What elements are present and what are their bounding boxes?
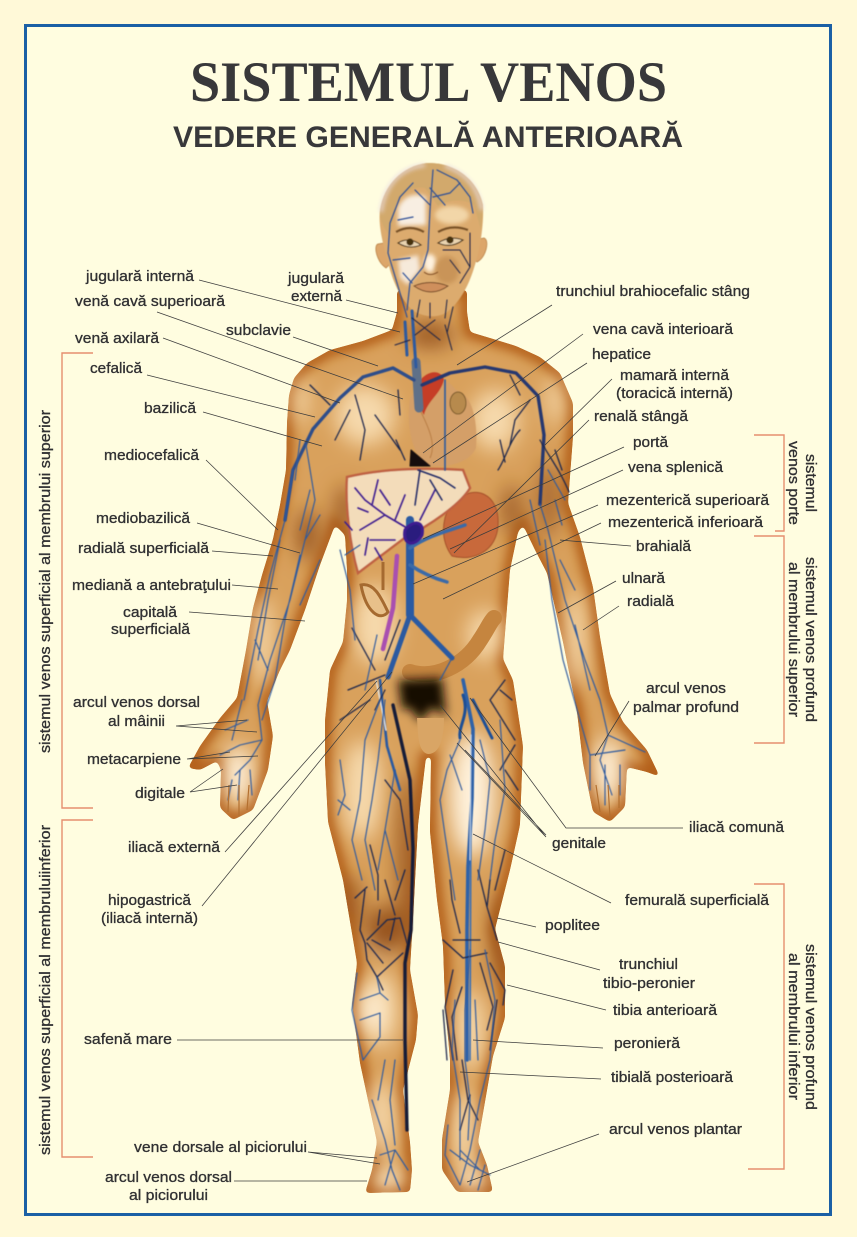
label: peronieră [473,1035,681,1052]
label: jugulară externă: externă [291,288,343,305]
label: arcul venos plantar: arcul venos plantar [609,1121,742,1138]
label: vena splenică: vena splenică [628,459,724,476]
label: poplitee [497,917,600,934]
label: iliacă externă: iliacă externă [128,839,221,856]
label: arcul venos dorsal al mâinii: arcul venos dorsal [73,694,200,711]
label: mediocefalică [104,447,278,530]
bracket: deep lower limb: al membrului inferior [785,953,802,1100]
label: arcul venos dorsal al piciorului [105,1169,367,1204]
label: mezenterică superioară [413,492,770,584]
label: mezenterică inferioară: mezenterică inferioară [608,514,764,531]
label: arcul venos dorsal al mâinii [73,694,257,732]
subclavian arcs [285,368,414,520]
label: mezenterică superioară: mezenterică superioară [606,492,770,509]
eyes [396,227,468,247]
label: trunchiul tibio-peronier: trunchiul [619,956,678,973]
label: jugulară externă: jugulară [287,270,345,287]
label: arcul venos dorsal al piciorului: arcul venos dorsal [105,1169,232,1186]
label: mediobazilică [96,510,300,553]
label: digitale [135,769,237,802]
main veins [285,311,544,1130]
face veins [388,170,473,317]
stomach and spleen [444,492,498,558]
label: capitală superficială [111,604,305,638]
label: arcul venos palmar profund [595,680,739,756]
label: brahială: brahială [636,538,692,555]
blue superficial veins [220,440,645,1190]
sigmoid colon [410,618,494,674]
label: radială: radială [627,593,675,610]
label: portă: portă [633,434,669,451]
label: tibia anterioară: tibia anterioară [613,1002,718,1019]
bracket: deep lower limb: sistemul venos profund [802,944,819,1110]
label: radială superficială: radială superficială [78,540,210,557]
bracket: deep lower limb [748,884,819,1169]
label: arcul venos plantar [467,1121,742,1182]
label: venă axilară [75,330,340,403]
label: genitale: genitale [552,835,606,852]
dark face and neck veins [395,233,470,350]
liver [347,469,470,573]
label: hepatice: hepatice [592,346,651,363]
bracket: superficial upper limb [37,353,93,808]
bracket: deep upper limb: sistemul venos profund [802,557,819,722]
label: arcul venos palmar profund: palmar profund [633,699,739,716]
label: capitală superficială: superficială [111,621,191,638]
label: trunchiul brahiocefalic stâng: trunchiul brahiocefalic stâng [556,283,750,300]
label: renală stângă [454,408,689,553]
label: mediocefalică: mediocefalică [104,447,200,464]
label: bazilică [144,400,322,446]
label: mamară internă: (toracică internă) [616,385,733,402]
label: trunchiul brahiocefalic stâng [457,283,750,365]
label: metacarpiene [87,751,258,768]
label: renală stângă: renală stângă [594,408,689,425]
inferior vena cava [406,520,414,615]
pubic hair [398,678,446,722]
bracket: portal system: sistemul [802,454,819,512]
label: arcul venos palmar profund: arcul venos [646,680,726,697]
bracket: portal system: venos porte [785,441,802,525]
label: vena splenică [450,459,724,549]
label: cefalică [90,360,315,417]
label: tibială posterioară: tibială posterioară [611,1069,734,1086]
label: vena cavă interioară: vena cavă interioară [593,321,734,338]
label: jugulară internă: jugulară internă [85,268,195,285]
label: mamară internă: mamară internă [620,367,730,384]
label: hipogastrică [101,672,392,927]
label: mediobazilică: mediobazilică [96,510,191,527]
heart [409,372,476,466]
finger lines [228,785,619,818]
bracket: deep upper limb: al membrului superior [785,562,802,717]
label: metacarpiene: metacarpiene [87,751,181,768]
head [376,163,487,316]
subtitle: VEDERE GENERALĂ ANTERIOARĂ [173,120,683,154]
label: hepatice [433,346,651,463]
label: genitale [440,705,606,852]
title: SISTEMUL VENOS [190,51,667,114]
label: cefalică: cefalică [90,360,143,377]
label: brahială [560,538,692,555]
portal vein [383,556,397,649]
label: ulnară [558,570,666,613]
bracket: superficial upper limb: sistemul venos superficial al membrului superior [37,410,54,753]
bracket: deep upper limb [754,536,819,743]
label: iliacă comună: iliacă comună [689,819,785,836]
mouth [414,272,448,292]
label: radială superficială [78,540,273,557]
label: venă cavă superioară [75,293,403,399]
label: arcul venos dorsal al piciorului: al piciorului [129,1187,208,1204]
label: subclavie: subclavie [226,322,291,339]
label: poplitee: poplitee [545,917,600,934]
label: tibia anterioară [507,985,718,1019]
label: iliacă externă [128,681,377,856]
label: jugulară internă [85,268,400,332]
label: peronieră: peronieră [614,1035,681,1052]
bracket: superficial lower limb [37,820,93,1157]
bracket: portal system [754,435,819,531]
genitalia [417,718,444,754]
label: hipogastrică: hipogastrică [108,892,192,909]
label: portă [423,434,669,539]
label: femurală superficială: femurală superficială [625,892,770,909]
label: mamară internă [545,367,733,445]
label: radială [583,593,675,630]
label: vene dorsale al piciorului: vene dorsale al piciorului [134,1139,307,1156]
label: ulnară: ulnară [622,570,666,587]
label: mediană a antebraţului: mediană a antebraţului [72,577,231,594]
label: arcul venos dorsal al mâinii: al mâinii [108,713,165,730]
label: iliacă comună [470,698,785,836]
label: safenă mare: safenă mare [84,1031,172,1048]
label: subclavie [226,322,378,366]
label: venă cavă superioară: venă cavă superioară [75,293,226,310]
superior vena cava [416,362,419,408]
label: mezenterică inferioară [443,514,764,599]
dark superficial veins [310,375,569,1130]
label: vena cavă interioară [423,321,734,453]
label: trunchiul tibio-peronier [498,942,695,992]
label: hipogastrică: (iliacă internă) [101,910,198,927]
label: jugulară externă [287,270,398,313]
label: vene dorsale al piciorului [134,1139,380,1164]
label: capitală superficială: capitală [123,604,178,621]
label: bazilică: bazilică [144,400,197,417]
label: digitale: digitale [135,785,185,802]
label: femurală superficială [473,834,770,909]
anatomical figure [188,163,660,1193]
body silhouette [188,290,660,1193]
label: trunchiul tibio-peronier: tibio-peronier [603,975,695,992]
bracket: superficial lower limb: sistemul venos superficial al membruluiinferior [37,825,54,1155]
label: venă axilară: venă axilară [75,330,160,347]
label: tibială posterioară [460,1069,734,1086]
caecum [361,562,388,616]
